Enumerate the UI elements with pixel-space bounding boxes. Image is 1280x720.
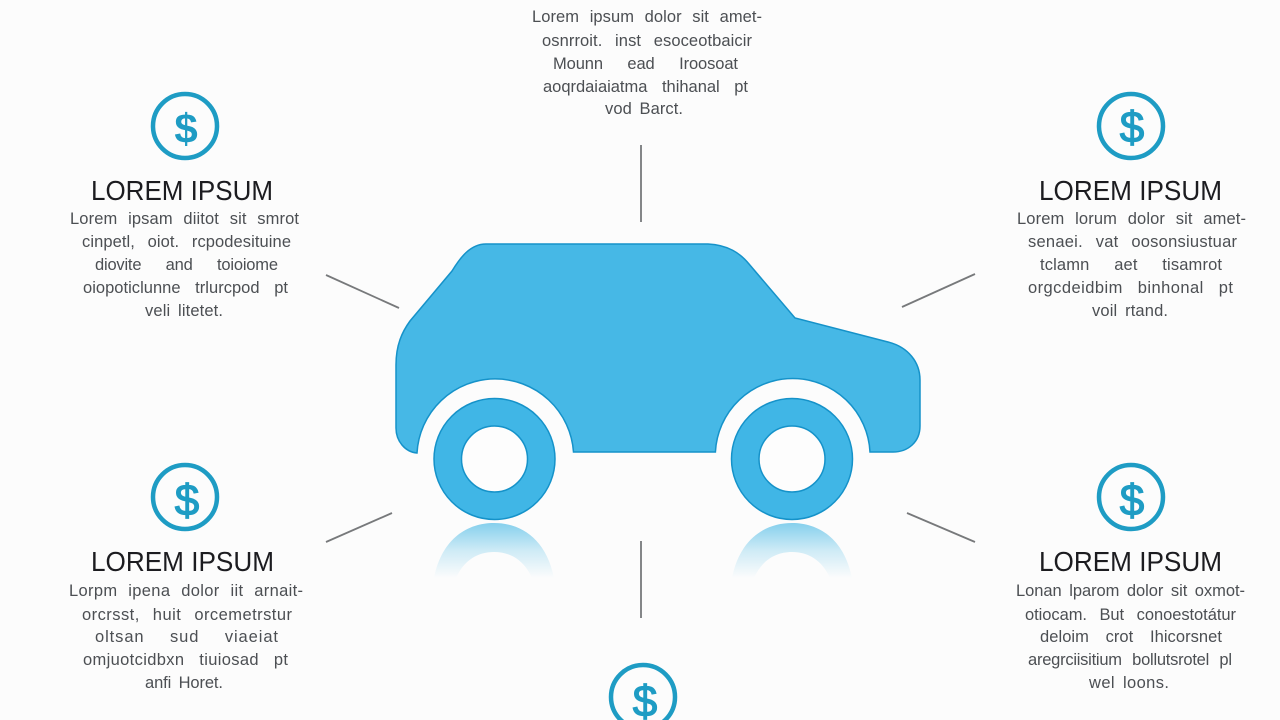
heading: LOREM IPSUM	[1039, 175, 1222, 206]
connector lines	[326, 145, 975, 618]
body text: diovite and toioiome	[95, 256, 278, 274]
block: lower left	[69, 465, 303, 692]
car body	[396, 244, 920, 453]
front wheel reflection	[434, 523, 554, 578]
body text: senaei. vat oosonsiustuar	[1028, 233, 1238, 251]
body text	[1017, 210, 1246, 320]
block: top center text	[532, 8, 762, 118]
body text: aregrciisitium bollutsrotel pl	[1028, 651, 1232, 669]
body text: Lonan lparom dolor sit oxmot-	[1016, 582, 1245, 600]
block: top center text: vod Barct.	[605, 100, 683, 118]
icon: dollar coin	[153, 94, 217, 158]
rear wheel	[732, 398, 852, 520]
body text: veli litetet.	[145, 302, 223, 320]
front wheel	[434, 398, 555, 520]
body text	[70, 210, 299, 320]
icon: dollar coin	[1099, 465, 1163, 529]
body text	[69, 582, 303, 692]
block: top center text: aoqrdaiaiatma thihanal pt	[543, 78, 748, 96]
icon: bottom center dollar coin	[611, 665, 675, 720]
body text: orgcdeidbim binhonal pt	[1028, 279, 1233, 297]
body text: otiocam. But conoestotátur	[1025, 606, 1236, 624]
body text: anfi Horet.	[145, 674, 223, 692]
body text: oiopoticlunne trlurcpod pt	[83, 279, 288, 297]
body text: voil rtand.	[1092, 302, 1168, 320]
body text: Lorem ipsam diitot sit smrot	[70, 210, 299, 228]
body text: wel loons.	[1088, 674, 1169, 692]
block: top center text: osnrroit. inst esoceotbaicir	[542, 32, 752, 50]
body text: omjuotcidbxn tiuiosad pt	[83, 651, 288, 669]
body text: Lorpm ipena dolor iit arnait-	[69, 582, 303, 600]
icon: dollar coin: $	[1120, 476, 1144, 525]
body text: orcrsst, huit orcemetrstur	[82, 606, 292, 624]
rear wheel reflection	[732, 523, 852, 578]
block: upper left	[70, 94, 299, 320]
block: top center text: Lorem ipsum dolor sit amet-	[532, 8, 762, 26]
heading: LOREM IPSUM	[91, 175, 273, 206]
heading: LOREM IPSUM	[1039, 546, 1222, 577]
icon: dollar coin: $	[175, 476, 199, 525]
heading: LOREM IPSUM	[91, 546, 274, 577]
body text: deloim crot Ihicorsnet	[1040, 628, 1222, 646]
icon: dollar coin: $	[1120, 103, 1144, 152]
block: top center text: Mounn ead Iroosoat	[553, 55, 738, 73]
body text	[1016, 582, 1245, 692]
body text: Lorem lorum dolor sit amet-	[1017, 210, 1246, 228]
icon: dollar coin: $	[174, 105, 198, 152]
block: upper right	[1017, 94, 1246, 320]
block: lower right	[1016, 465, 1245, 692]
body text: oltsan sud viaeiat	[95, 628, 278, 646]
icon: dollar coin	[1099, 94, 1163, 158]
icon: dollar coin	[153, 465, 217, 529]
body text: cinpetl, oiot. rcpodesituine	[82, 233, 291, 251]
body text: tclamn aet tisamrot	[1040, 256, 1222, 274]
car illustration	[396, 244, 920, 578]
